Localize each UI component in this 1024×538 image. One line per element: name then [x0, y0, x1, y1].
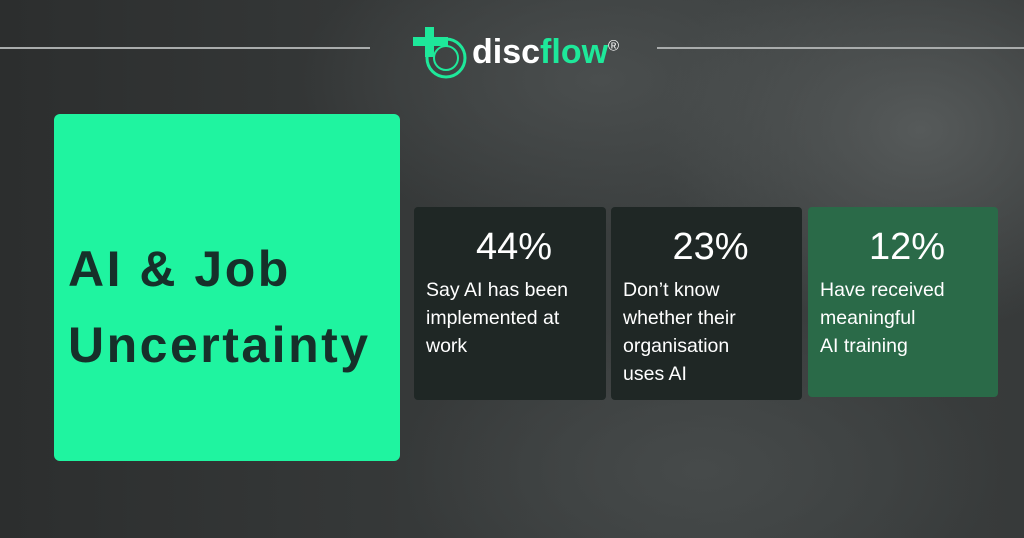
card: 23%: 23%	[672, 226, 749, 268]
card: 12%: Have received	[820, 279, 945, 301]
icon: logo mark	[413, 27, 466, 78]
card: 12%: AI training	[820, 335, 908, 357]
card: 12%: meaningful	[820, 307, 915, 329]
card: 44%: 44%	[476, 226, 552, 268]
logo	[413, 27, 619, 78]
title	[68, 241, 371, 373]
title panel	[54, 114, 400, 461]
card: 23%: Don’t know	[623, 279, 719, 301]
card: 23%: organisation	[623, 335, 729, 357]
card: 23%: uses AI	[623, 363, 687, 385]
card: 23%: whether their	[623, 307, 736, 329]
card: 12%: 12%	[869, 226, 945, 268]
logo text: discflow®	[472, 33, 619, 71]
card: 44%: Say AI has been	[426, 279, 568, 301]
title: AI & Job	[68, 241, 291, 297]
card: 44%: work	[426, 335, 467, 357]
card: 12%	[808, 207, 998, 397]
card: 44%	[414, 207, 606, 400]
card: 44%: implemented at	[426, 307, 559, 329]
title: Uncertainty	[68, 317, 371, 373]
card: 23%	[611, 207, 802, 400]
